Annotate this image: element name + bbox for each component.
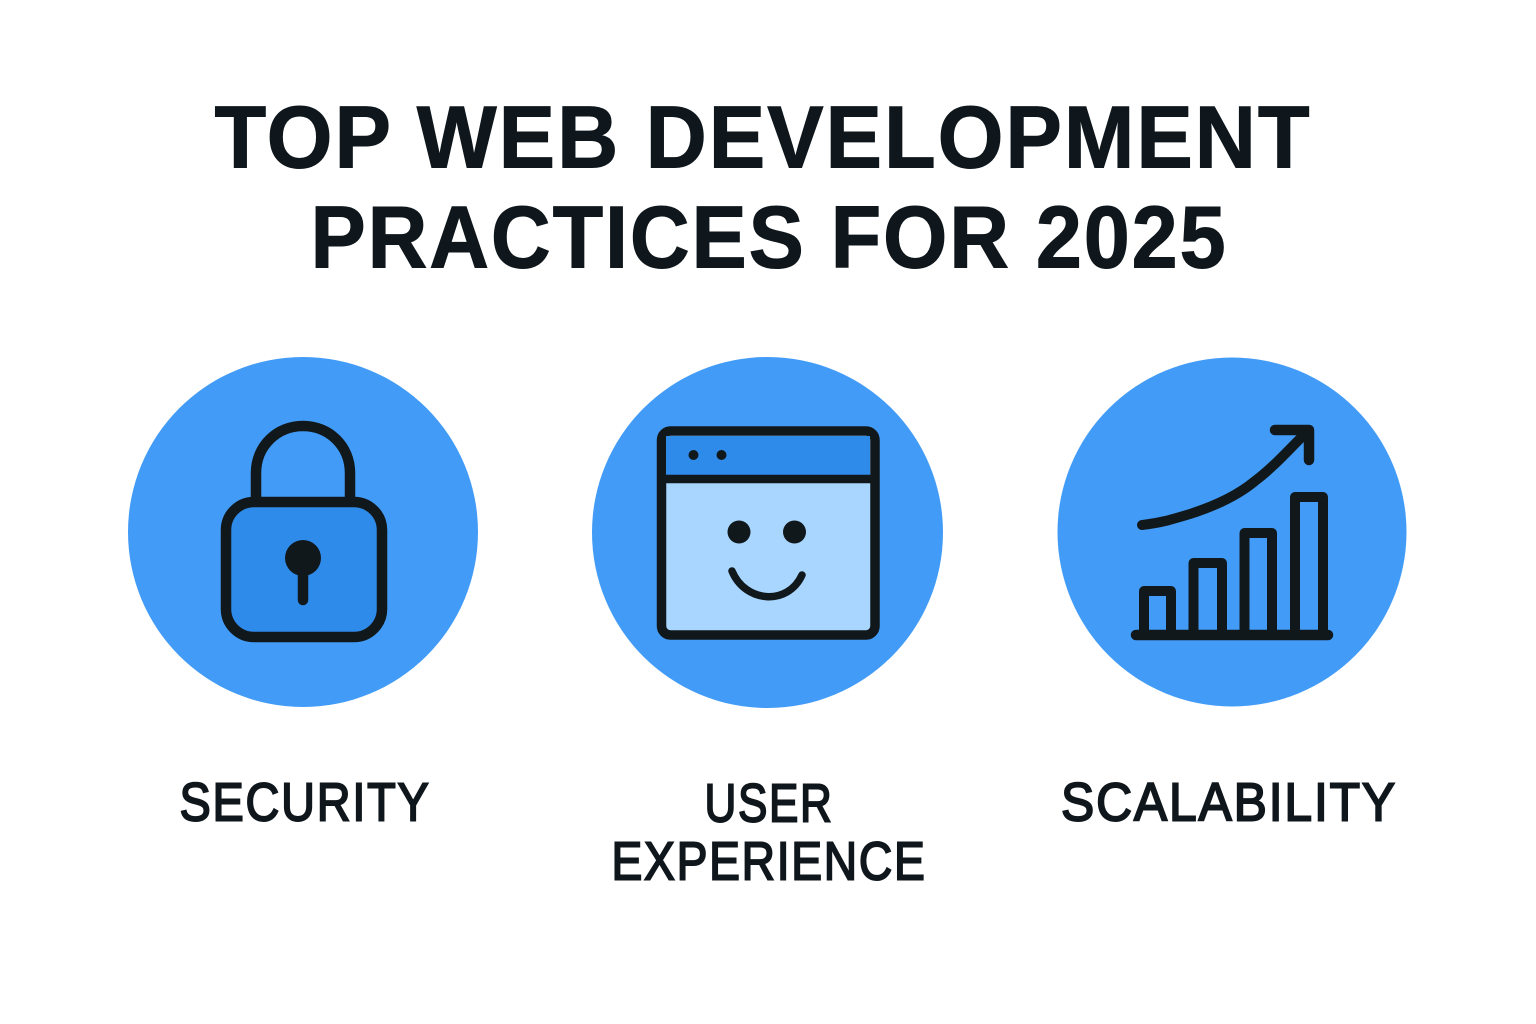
title: PRACTICES FOR 2025 xyxy=(310,188,1228,286)
icon: padlock xyxy=(226,426,382,637)
icon: security circle xyxy=(128,357,478,707)
panel: scalability xyxy=(1058,358,1406,706)
icon: growth chart xyxy=(1136,430,1328,635)
icon: browser window xyxy=(661,431,875,635)
panel: security xyxy=(128,357,478,707)
icon: user experience circle xyxy=(592,357,943,708)
title: TOP WEB DEVELOPMENT xyxy=(214,88,1312,186)
title xyxy=(214,88,1312,286)
label: scalability: SCALABILITY xyxy=(1061,772,1397,832)
label: user experience xyxy=(612,774,926,892)
label: user experience: EXPERIENCE xyxy=(612,832,926,892)
label: security: SECURITY xyxy=(180,772,430,832)
panel: user experience xyxy=(592,357,943,708)
label: user experience: USER xyxy=(704,774,834,834)
icon: scalability circle xyxy=(1058,358,1406,706)
